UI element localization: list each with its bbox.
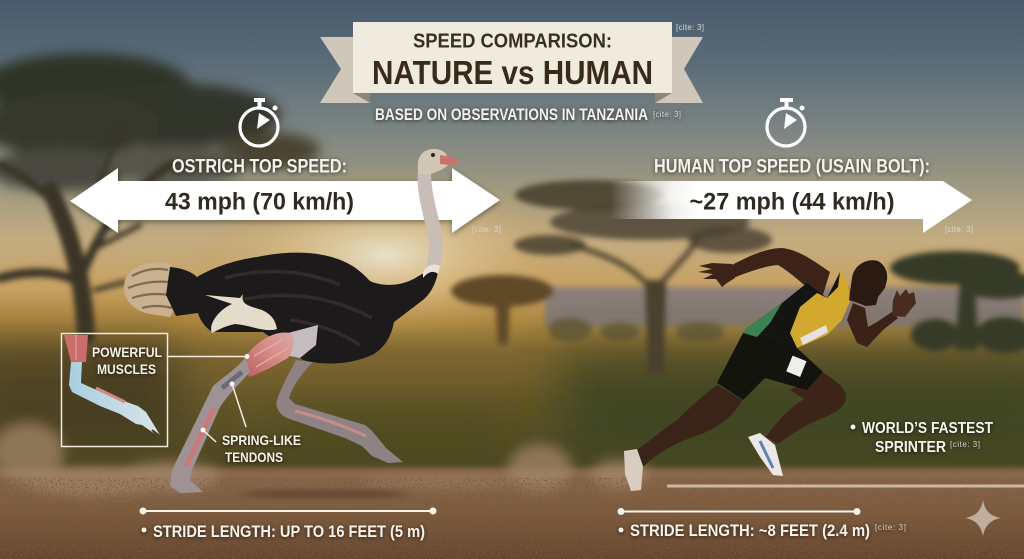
back arm [730,248,830,298]
title line 2: NATURE vs HUMAN [372,54,653,91]
label: powerful muscles: POWERFUL [92,344,162,360]
stride bar: ostrich [140,508,436,514]
callout line: muscles [168,354,250,359]
arrow: human speed [610,181,972,233]
label: world's fastest sprinter [850,420,993,456]
stride bar: human [618,508,860,515]
double arrow: ostrich speed [70,168,500,233]
ground speckle [0,478,1024,559]
ostrich speed value: 43 mph (70 km/h) [165,188,354,216]
shorts [717,333,823,400]
ground shadow [240,490,410,498]
human speed label: HUMAN TOP SPEED (USAIN BOLT): [654,156,930,178]
neck collar [423,264,440,278]
label: spring-like tendons [222,432,301,465]
sprinter [624,248,916,491]
stride text: human: [cite: 3] [875,523,906,532]
label: spring-like tendons: SPRING-LIKE [222,432,301,448]
front hand [892,289,916,317]
back leg [637,385,742,467]
front arm [847,303,898,347]
banner citation: [cite: 3] [676,23,704,32]
ostrich citation: [cite: 3] [472,225,501,234]
ostrich [124,149,461,493]
white wing feathers [205,294,277,333]
label: world's fastest sprinter: WORLD’S FASTEST [862,420,993,437]
neck and head [849,260,887,306]
label: powerful muscles: MUSCLES [97,361,156,377]
near leg [170,358,250,493]
sparkle [965,500,1001,536]
subtitle: [cite: 3] [653,110,681,119]
ostrich far leg [276,360,403,463]
label: powerful muscles [92,344,162,377]
inset: leg anatomy [62,334,168,446]
icon: stopwatch left [240,98,278,146]
subtitle: BASED ON OBSERVATIONS IN TANZANIA [375,105,648,124]
neck [418,170,443,268]
human speed value: ~27 mph (44 km/h) [690,188,894,216]
ostrich speed label: OSTRICH TOP SPEED: [172,156,347,178]
stride text: human: STRIDE LENGTH: ~8 FEET (2.4 m) [630,521,870,540]
title line 1: SPEED COMPARISON: [413,30,612,52]
vest [743,272,850,348]
icon: stopwatch right [767,98,805,146]
grey upper thigh [285,325,318,358]
tail feathers [124,262,180,317]
title banner [320,22,703,103]
human citation: [cite: 3] [945,225,973,234]
label: spring-like tendons: TENDONS [225,449,283,465]
head and beak [418,149,461,174]
front leg [766,372,846,444]
callout lines: tendons [200,382,246,442]
stride text: ostrich: STRIDE LENGTH: UP TO 16 FEET (5 m) [153,522,425,541]
label: world's fastest sprinter: SPRINTER [875,439,946,456]
background trees [0,53,1024,372]
back hand [698,263,735,287]
track line [667,484,1024,488]
bib tag [786,356,806,377]
front shoe [748,433,783,476]
label: world's fastest sprinter: [cite: 3] [950,440,980,449]
body plumage [166,253,439,364]
dust clouds [0,422,648,496]
thigh muscle [244,332,294,377]
back shoe [624,449,643,491]
